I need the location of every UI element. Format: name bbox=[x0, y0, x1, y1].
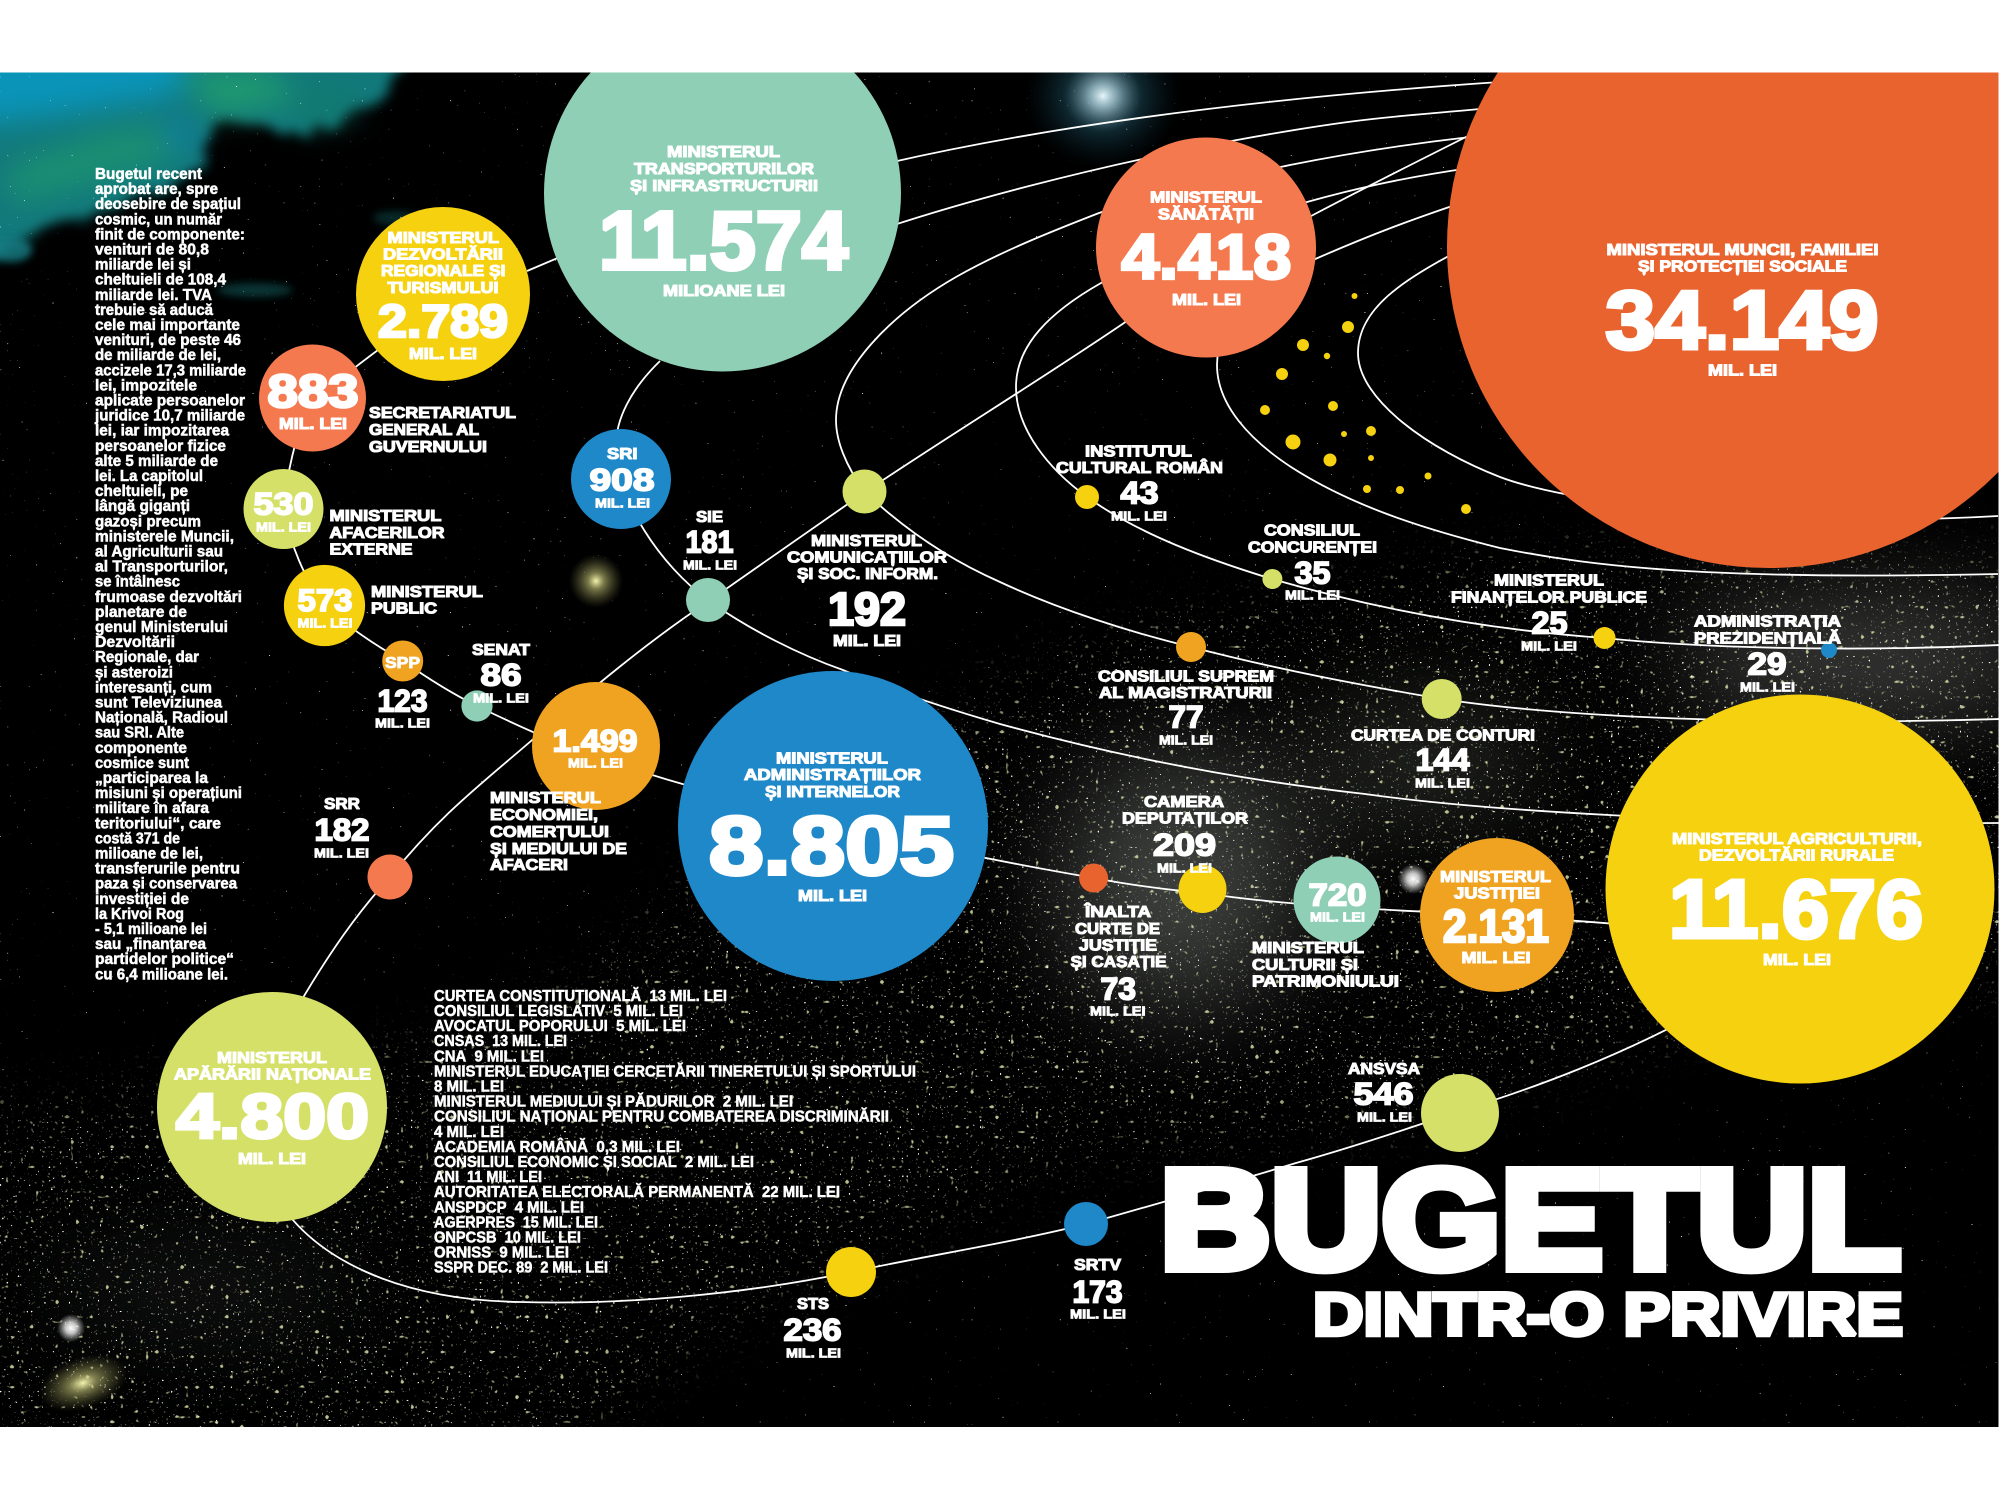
planet: Institutul Cultural Roman: MIL. LEI bbox=[1111, 508, 1167, 524]
intro text block: sunt Televiziunea bbox=[95, 694, 222, 712]
planet: SRI bbox=[571, 429, 671, 529]
list: small institutions: CURTEA CONSTITUȚIONALĂ 13 MIL. LEI bbox=[434, 986, 727, 1005]
planet: Comunicatii: 192 bbox=[828, 583, 906, 635]
planet: Economie: MINISTERUL bbox=[490, 790, 601, 807]
planet: Transporturi: TRANSPORTURILOR bbox=[634, 161, 814, 178]
planet: Inalta Curte: MIL. LEI bbox=[1090, 1004, 1146, 1018]
planet: SRI: MIL. LEI bbox=[595, 496, 650, 510]
intro text block: miliarde lei și bbox=[95, 257, 191, 274]
planet: Economie: ECONOMIEI, bbox=[490, 807, 598, 824]
planet: Finante Publice: 25 bbox=[1532, 604, 1568, 640]
list: small institutions: CNSAS 13 MIL. LEI bbox=[434, 1033, 567, 1050]
intro text block: planetare de bbox=[95, 604, 187, 621]
planet: Curtea de Conturi bbox=[1351, 679, 1535, 790]
planet: SRR: 182 bbox=[314, 812, 370, 848]
planet: Consiliul Concurentei: CONCURENȚEI bbox=[1248, 540, 1377, 556]
planet: SRTV: SRTV bbox=[1074, 1257, 1121, 1274]
intro text block: cele mai importante bbox=[95, 317, 240, 334]
intro text block: lei. La capitolul bbox=[95, 468, 203, 485]
planet: Transporturi: ȘI INFRASTRUCTURII bbox=[630, 178, 818, 195]
planet: Cultura: MIL. LEI bbox=[1310, 910, 1365, 924]
list: small institutions: ANSPDCP 4 MIL. LEI bbox=[434, 1199, 584, 1216]
planet: Economie bbox=[490, 682, 660, 874]
list: small institutions: ORNISS 9 MIL. LEI bbox=[434, 1245, 569, 1262]
intro text block: Regionale, dar bbox=[95, 649, 199, 666]
planet: Consiliul Concurentei: MIL. LEI bbox=[1285, 588, 1340, 602]
list: small institutions: AVOCATUL POPORULUI 5 MIL. LEI bbox=[434, 1018, 686, 1035]
planet: Senat: SENAT bbox=[472, 642, 530, 659]
list: small institutions: 4 MIL. LEI bbox=[434, 1124, 504, 1141]
title: BUGETUL bbox=[1160, 1140, 1901, 1298]
planet: Consiliul Concurentei bbox=[1248, 522, 1377, 602]
planet: Senat: 86 bbox=[480, 656, 522, 692]
planet: Afaceri Externe: EXTERNE bbox=[330, 542, 413, 558]
planet: SIE: MIL. LEI bbox=[683, 558, 737, 572]
planet: Secretariatul General: GENERAL AL bbox=[369, 422, 479, 439]
intro text block: cheltuieli, pe bbox=[95, 483, 188, 500]
intro text block: „participarea la bbox=[95, 770, 208, 787]
planet: Consiliul Concurentei: 35 bbox=[1294, 554, 1330, 590]
planet: Aparare Nationala: MINISTERUL bbox=[217, 1050, 327, 1067]
planet: STS: STS bbox=[797, 1296, 829, 1313]
planet: Administratia Prezidentiala: ADMINISTRAȚIA bbox=[1694, 614, 1842, 630]
planet: Consiliul Suprem al Magistraturii: CONSILIUL SUPREM bbox=[1098, 668, 1274, 686]
planet: SRI: 908 bbox=[590, 462, 654, 498]
planet: Transporturi: MILIOANE LEI bbox=[663, 283, 785, 300]
planet: Administratie si Interne: ȘI INTERNELOR bbox=[765, 784, 900, 801]
list: small institutions: ACADEMIA ROMÂNĂ 0,3 MIL. LEI bbox=[434, 1137, 680, 1156]
planet: Cultura bbox=[1252, 856, 1399, 990]
planet: Ministerul Public: MIL. LEI bbox=[298, 616, 352, 630]
planet: Transporturi: MINISTERUL bbox=[667, 144, 780, 161]
planet: Camera Deputatilor: 209 bbox=[1153, 826, 1216, 862]
intro text block: persoanelor fizice bbox=[95, 438, 226, 455]
intro text block: al Transporturilor, bbox=[95, 559, 228, 576]
intro text block: la Krivoi Rog bbox=[95, 906, 184, 923]
planet: Curtea de Conturi: MIL. LEI bbox=[1415, 776, 1470, 790]
list: small institutions: CNA 9 MIL. LEI bbox=[434, 1048, 544, 1065]
planet: Munca: MINISTERUL MUNCII, FAMILIEI bbox=[1606, 242, 1878, 259]
planet: Curtea de Conturi: 144 bbox=[1416, 742, 1470, 778]
planet: Sanatate: MIL. LEI bbox=[1172, 292, 1241, 309]
planet: Administratie si Interne: MINISTERUL bbox=[776, 750, 888, 768]
planet: Administratia Prezidentiala: MIL. LEI bbox=[1740, 680, 1795, 694]
planet: Secretariatul General: 883 bbox=[268, 365, 358, 417]
planet: SIE bbox=[683, 509, 737, 622]
intro text block: și asteroizi bbox=[95, 664, 173, 681]
list: small institutions: AGERPRES 15 MIL. LEI bbox=[434, 1214, 598, 1231]
planet: Comunicatii: ȘI SOC. INFORM. bbox=[797, 566, 938, 583]
intro text block: deosebire de spațiul bbox=[95, 196, 241, 213]
intro text block: lei, iar impozitarea bbox=[95, 423, 229, 440]
planet: Afaceri Externe: MIL. LEI bbox=[256, 520, 311, 534]
planet: ANSVSA: 546 bbox=[1354, 1076, 1414, 1112]
planet: ANSVSA: ANSVSA bbox=[1348, 1061, 1420, 1078]
planet: Administratia Prezidentiala bbox=[1694, 614, 1842, 694]
list: small institutions: MINISTERUL MEDIULUI ȘI PĂDURILOR 2 MIL. LEI bbox=[434, 1092, 793, 1111]
intro text block: venituri de 80,8 bbox=[95, 242, 209, 258]
planet: Inalta Curte: JUSTIȚIE bbox=[1079, 938, 1157, 954]
list: small institutions: AUTORITATEA ELECTORALĂ PERMANENTĂ 22 MIL. LEI bbox=[434, 1182, 840, 1201]
intro text block: aplicate persoanelor bbox=[95, 392, 245, 410]
planet: SIE: 181 bbox=[686, 524, 734, 560]
planet: Cultura: 720 bbox=[1308, 876, 1366, 912]
intro text block: lei, impozitele bbox=[95, 377, 197, 394]
planet: Institutul Cultural Roman bbox=[1056, 444, 1223, 524]
planet: Dezvoltare Regionala: TURISMULUI bbox=[388, 280, 498, 297]
planet: Munca bbox=[1447, 72, 1998, 568]
planet: Senat bbox=[461, 642, 530, 722]
planet: Administratie si Interne: ADMINISTRAȚIILOR bbox=[744, 767, 922, 784]
list: small institutions: ANI 11 MIL. LEI bbox=[434, 1169, 542, 1186]
intro text block: Națională, Radioul bbox=[95, 710, 228, 727]
planet: Camera Deputatilor: DEPUTAȚILOR bbox=[1122, 810, 1248, 828]
planet: Sanatate: MINISTERUL bbox=[1150, 190, 1262, 206]
planet: Economie: MIL. LEI bbox=[568, 756, 623, 770]
planet: Secretariatul General: GUVERNULUI bbox=[369, 439, 487, 456]
planet: Inalta Curte: CURTE DE bbox=[1075, 921, 1160, 938]
intro text block: misiuni și operațiuni bbox=[95, 785, 242, 802]
planet: Dezvoltare Regionala: MIL. LEI bbox=[409, 346, 477, 363]
planet: SRTV bbox=[1064, 1202, 1126, 1322]
planet: Aparare Nationala: MIL. LEI bbox=[238, 1151, 306, 1168]
intro text block: trebuie să aducă bbox=[95, 302, 213, 319]
planet: Comunicatii bbox=[787, 470, 947, 650]
planet: Aparare Nationala: APĂRĂRII NAȚIONALE bbox=[174, 1064, 371, 1084]
planet: Agricultura: MIL. LEI bbox=[1763, 952, 1831, 969]
intro text block: al Agriculturii sau bbox=[95, 544, 223, 560]
planet: SRTV: MIL. LEI bbox=[1070, 1306, 1126, 1322]
intro text block: de miliarde de lei, bbox=[95, 347, 221, 364]
intro text block: gazoși precum bbox=[95, 513, 201, 530]
planet: Dezvoltare Regionala: MINISTERUL bbox=[388, 230, 499, 247]
planet: Ministerul Public: 573 bbox=[298, 582, 352, 618]
planet: Economie: ȘI MEDIULUI DE bbox=[490, 841, 627, 858]
intro text block: partidelor politice“ bbox=[95, 951, 234, 968]
planet: Finante Publice: MIL. LEI bbox=[1521, 638, 1577, 654]
planet: Consiliul Suprem al Magistraturii: 77 bbox=[1168, 698, 1204, 734]
planet: Consiliul Concurentei: CONSILIUL bbox=[1264, 522, 1360, 540]
planet: Sanatate: 4.418 bbox=[1122, 222, 1291, 292]
planet: SRR bbox=[314, 796, 412, 900]
intro text block: costă 371 de bbox=[95, 830, 180, 847]
planet: Finante Publice: MINISTERUL bbox=[1494, 572, 1604, 590]
planet: Aparare Nationala: 4.800 bbox=[176, 1082, 369, 1152]
planet: Economie: COMERȚULUI bbox=[490, 824, 609, 841]
planet: Camera Deputatilor: CAMERA bbox=[1144, 794, 1225, 811]
intro text block: investiției de bbox=[95, 891, 189, 908]
planet: Dezvoltare Regionala: DEZVOLTĂRII bbox=[383, 244, 503, 264]
intro text block: juridice 10,7 miliarde bbox=[94, 408, 245, 425]
planet: STS: 236 bbox=[784, 1312, 842, 1348]
planet: Justitie bbox=[1420, 838, 1574, 992]
planet: Ministerul Public: MINISTERUL bbox=[371, 584, 483, 601]
planet: Afaceri Externe bbox=[244, 469, 445, 558]
planet: Justitie: JUSTIȚIEI bbox=[1454, 886, 1540, 902]
list: small institutions: MINISTERUL EDUCAȚIEI CERCETĂRII TINERETULUI ȘI SPORTULUI bbox=[434, 1061, 916, 1080]
planet: Comunicatii: MINISTERUL bbox=[811, 533, 922, 550]
planet: Agricultura: 11.676 bbox=[1669, 862, 1923, 956]
intro text block: lângă giganți bbox=[95, 498, 190, 515]
planet: SRTV: 173 bbox=[1072, 1274, 1122, 1310]
planet: Economie: 1.499 bbox=[552, 722, 638, 758]
planet: Dezvoltare Regionala: 2.789 bbox=[378, 295, 508, 347]
planet: Institutul Cultural Roman: 43 bbox=[1120, 474, 1158, 510]
planet: Finante Publice: FINANȚELOR PUBLICE bbox=[1451, 590, 1647, 606]
planet: Administratia Prezidentiala: PREZIDENȚIALĂ bbox=[1694, 628, 1842, 648]
intro text block: milioane de lei, bbox=[95, 846, 203, 862]
planet: Transporturi bbox=[544, 72, 901, 372]
planet: Camera Deputatilor: MIL. LEI bbox=[1157, 860, 1212, 876]
planet: Munca: ȘI PROTECȚIEI SOCIALE bbox=[1638, 258, 1847, 276]
planet: Aparare Nationala bbox=[157, 992, 387, 1222]
intro text block: genul Ministerului bbox=[95, 619, 228, 636]
planet: SIE: SIE bbox=[696, 509, 723, 526]
icons: asteroid belt bbox=[1260, 293, 1471, 514]
planet: Secretariatul General: SECRETARIATUL bbox=[369, 405, 516, 422]
intro text block: accizele 17,3 miliarde bbox=[95, 362, 246, 379]
planet: SPP: SPP bbox=[385, 655, 420, 672]
planet: Munca: MIL. LEI bbox=[1708, 362, 1777, 380]
intro text block: venituri, de peste 46 bbox=[95, 332, 241, 349]
intro text block: militare în afara bbox=[95, 800, 209, 817]
planet: SRR: MIL. LEI bbox=[314, 846, 369, 860]
planet: Inalta Curte: 73 bbox=[1100, 970, 1136, 1006]
planet: Cultura: MINISTERUL bbox=[1252, 940, 1364, 957]
intro text block: interesanți, cum bbox=[95, 679, 212, 696]
planet: Curtea de Conturi: CURTEA DE CONTURI bbox=[1351, 728, 1535, 744]
intro text block: componente bbox=[95, 740, 187, 757]
planet: ANSVSA bbox=[1348, 1061, 1499, 1152]
planet: Comunicatii: COMUNICAȚIILOR bbox=[787, 550, 947, 566]
planet: ANSVSA: MIL. LEI bbox=[1357, 1110, 1412, 1124]
intro text block: cosmic, un număr bbox=[95, 211, 222, 228]
intro text block: Bugetul recent bbox=[95, 166, 203, 183]
orbit lines bbox=[272, 82, 2000, 1303]
intro text block: se întâlnesc bbox=[95, 574, 180, 591]
planet: Consiliul Suprem al Magistraturii bbox=[1098, 632, 1274, 748]
planet: Comunicatii: MIL. LEI bbox=[833, 633, 901, 650]
planet: Consiliul Suprem al Magistraturii: AL MAGISTRATURII bbox=[1099, 685, 1272, 702]
planet: Ministerul Public bbox=[284, 565, 483, 646]
planet: Justitie: MINISTERUL bbox=[1440, 869, 1551, 886]
planet: Agricultura: DEZVOLTĂRII RURALE bbox=[1699, 846, 1894, 864]
list: small institutions: CONSILIUL LEGISLATIV 5 MIL. LEI bbox=[434, 1003, 683, 1020]
planet: Administratie si Interne: 8.805 bbox=[709, 799, 954, 892]
intro text block: cosmice sunt bbox=[95, 755, 190, 772]
planet: Administratie si Interne: MIL. LEI bbox=[798, 888, 867, 905]
intro text block: transferurile pentru bbox=[95, 861, 240, 878]
planet: Inalta Curte: ÎNALTA bbox=[1084, 902, 1152, 921]
planet: Consiliul Suprem al Magistraturii: MIL. LEI bbox=[1159, 732, 1213, 748]
planet: Secretariatul General bbox=[259, 344, 516, 456]
intro text block: sau SRI. Alte bbox=[95, 725, 184, 742]
planet: Dezvoltare Regionala bbox=[356, 207, 530, 381]
title: DINTR-O PRIVIRE bbox=[1313, 1281, 1903, 1348]
planet: Administratia Prezidentiala: 29 bbox=[1748, 646, 1786, 682]
planet: Senat: MIL. LEI bbox=[473, 690, 529, 706]
intro text block: Dezvoltării bbox=[95, 634, 175, 651]
planet: SPP: 123 bbox=[378, 682, 428, 718]
intro text block: sau „finanțarea bbox=[95, 936, 206, 953]
intro text block bbox=[94, 166, 246, 983]
planet: Munca: 34.149 bbox=[1606, 274, 1878, 366]
planet: Administratie si Interne bbox=[678, 671, 988, 981]
intro text block: paza și conservarea bbox=[95, 876, 237, 893]
intro text block: frumoase dezvoltări bbox=[95, 589, 242, 606]
planet: SRR: SRR bbox=[324, 796, 360, 813]
list: small institutions: CONSILIUL NAȚIONAL PENTRU COMBATEREA DISCRIMINĂRII bbox=[434, 1107, 889, 1126]
planet: Afaceri Externe: 530 bbox=[254, 486, 314, 522]
planet: Cultura: PATRIMONIULUI bbox=[1252, 974, 1399, 990]
planet: Economie: AFACERI bbox=[490, 857, 568, 874]
title bbox=[1160, 1140, 1903, 1348]
planet: Cultura: CULTURII ȘI bbox=[1252, 957, 1358, 974]
planet: Afaceri Externe: AFACERILOR bbox=[330, 525, 445, 542]
intro text block: cu 6,4 milioane lei. bbox=[95, 966, 228, 983]
planet: SPP bbox=[375, 640, 430, 730]
planet: Justitie: 2.131 bbox=[1443, 900, 1549, 952]
intro text block: - 5,1 milioane lei bbox=[95, 921, 207, 938]
intro text block: aprobat are, spre bbox=[95, 181, 218, 198]
list: small institutions: ONPCSB 10 MIL. LEI bbox=[434, 1230, 581, 1246]
intro text block: teritoriului“, care bbox=[95, 815, 221, 832]
intro text block: finit de componente: bbox=[95, 226, 245, 243]
planet: Justitie: MIL. LEI bbox=[1462, 950, 1530, 967]
planet: Inalta Curte bbox=[1070, 864, 1167, 1018]
planet: Agricultura bbox=[1606, 694, 1994, 1084]
planet: Transporturi: 11.574 bbox=[599, 194, 848, 287]
planet: SPP: MIL. LEI bbox=[375, 716, 430, 730]
planet: Afaceri Externe: MINISTERUL bbox=[330, 508, 442, 525]
list: small institutions bbox=[434, 986, 916, 1277]
planet: STS bbox=[784, 1247, 876, 1360]
planet: Secretariatul General: MIL. LEI bbox=[279, 416, 347, 433]
planet: Institutul Cultural Roman: INSTITUTUL bbox=[1085, 444, 1192, 460]
planet: Sanatate bbox=[1096, 138, 1316, 358]
list: small institutions: 8 MIL. LEI bbox=[434, 1078, 504, 1096]
intro text block: alte 5 miliarde de bbox=[95, 453, 218, 470]
planet: SRI: SRI bbox=[607, 446, 638, 463]
planet: Institutul Cultural Roman: CULTURAL ROMÂN bbox=[1056, 458, 1223, 477]
planet: Agricultura: MINISTERUL AGRICULTURII, bbox=[1672, 831, 1922, 848]
planet: Sanatate: SĂNĂTĂȚII bbox=[1158, 204, 1254, 224]
planet: Ministerul Public: PUBLIC bbox=[371, 600, 437, 618]
planet: Finante Publice bbox=[1451, 572, 1647, 654]
list: small institutions: SSPR DEC. 89 2 MIL. LEI bbox=[434, 1260, 608, 1277]
planet: Inalta Curte: ȘI CASAȚIE bbox=[1070, 954, 1167, 971]
planet: Dezvoltare Regionala: REGIONALE ȘI bbox=[381, 263, 506, 280]
intro text block: miliarde lei. TVA bbox=[95, 287, 212, 304]
planet: STS: MIL. LEI bbox=[786, 1346, 841, 1360]
intro text block: ministerele Muncii, bbox=[95, 528, 234, 545]
list: small institutions: CONSILIUL ECONOMIC ȘI SOCIAL 2 MIL. LEI bbox=[434, 1154, 754, 1171]
planet: Camera Deputatilor bbox=[1122, 794, 1248, 913]
intro text block: cheltuieli de 108,4 bbox=[95, 272, 226, 289]
